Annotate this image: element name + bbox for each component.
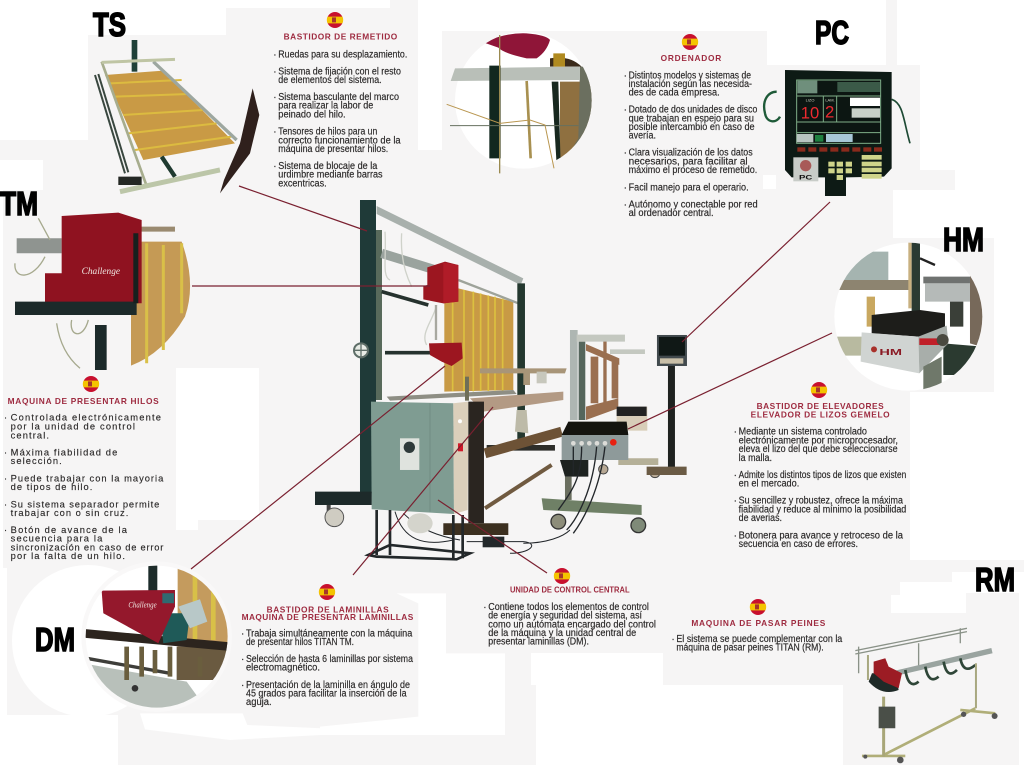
panel: maquina de presentar hilos: sincronización en caso de error (11, 542, 163, 552)
panel: bastidor de remetido: · (273, 66, 277, 77)
label PC: PC (815, 14, 849, 51)
panel: ordenador: · (624, 199, 627, 210)
panel: maquina de presentar hilos: · (4, 525, 7, 535)
icon: handwheel (354, 343, 368, 357)
icon: flag remetido (327, 12, 343, 28)
panel: maquina de presentar hilos: selección. (11, 456, 62, 466)
panel: bastidor de elevadores: fiabilidad y reduce al mínimo la posibilidad (739, 504, 906, 515)
panel: bastidor de remetido: excentricas. (278, 178, 327, 189)
photo: DM head (86, 566, 228, 708)
photo: HM lifter (830, 242, 987, 391)
panel: bastidor de elevadores: Su sencillez y robustez, ofrece la máxima (739, 496, 903, 507)
panel: ordenador: Clara visualización de los datos (629, 148, 753, 159)
panel: maquina de presentar hilos: secuencia para la (11, 534, 103, 544)
electrical cabinet (371, 402, 468, 514)
screen readout: 10 (801, 103, 819, 122)
panel: ordenador: instalación según las necesida- (629, 79, 752, 90)
panel: ordenador: des de cada empresa. (629, 88, 720, 99)
icon: flag laminillas (319, 584, 335, 600)
panel: unidad de control central: de la máquina y la unidad central de (488, 628, 637, 639)
panel: bastidor de elevadores: eleva el lizo del que debe seleccionarse (739, 444, 898, 455)
panel: unidad de control central: UNIDAD DE CONTROL CENTRAL (510, 585, 630, 595)
head DM (429, 343, 463, 366)
label DM: DM (35, 621, 75, 658)
yarn sheet (444, 285, 513, 392)
panel: bastidor de elevadores: BASTIDOR DE ELEVADORES (757, 401, 884, 411)
panel: maquina de presentar hilos: Su sistema separador permite (11, 499, 159, 509)
panel: bastidor de laminillas: aguja. (246, 697, 272, 708)
panel: maquina de presentar hilos: Botón de avance de la (11, 525, 128, 535)
panel: bastidor de laminillas (241, 604, 414, 708)
photo: PC control panel (764, 70, 910, 196)
panel: ordenador: que trabajan en espejo para su (629, 113, 754, 124)
panel: maquina de presentar hilos: por la unidad de control (11, 421, 135, 431)
panel: bastidor de laminillas: 45 grados para facilitar la inserción de la (246, 689, 407, 700)
photo: TS frame (95, 40, 259, 193)
panel: maquina de presentar hilos: de tipos de hilo. (11, 482, 92, 492)
icon: flag unidad (554, 568, 570, 584)
icon: flag elevadores (811, 382, 827, 398)
panel: bastidor de remetido: urdimbre mediante barras (278, 170, 383, 181)
brand: Challenge (128, 599, 157, 609)
function keys (797, 147, 882, 152)
badge PC (793, 157, 818, 181)
panel: maquina de presentar hilos: Máxima fiabilidad de (11, 447, 117, 457)
caster left (325, 505, 344, 527)
panel: bastidor de remetido: · (273, 161, 277, 172)
panel: maquina de pasar peines: MAQUINA DE PASAR PEINES (691, 618, 826, 628)
panel: bastidor de laminillas: Selección de hasta 6 laminillas por sistema (246, 654, 413, 665)
panel: ordenador: Facil manejo para el operario. (629, 182, 749, 193)
photo: TM head (15, 213, 190, 370)
connector lines (191, 186, 832, 575)
panel: bastidor de laminillas: Presentación de la laminilla en ángulo de (246, 680, 410, 691)
panel: unidad de control central: Contiene todos los elementos de control (488, 602, 649, 613)
icon: flag hilos (83, 376, 99, 392)
panel: bastidor de elevadores: Botonera para avance y retroceso de la (739, 530, 903, 541)
black pillar and base (315, 402, 570, 559)
panel: bastidor de elevadores (734, 401, 906, 550)
panel: bastidor de laminillas: · (241, 628, 244, 639)
panel: maquina de pasar peines: · (671, 634, 675, 645)
panel: bastidor de elevadores: · (734, 470, 737, 481)
panel: bastidor de elevadores: ELEVADOR DE LIZOS GEMELO (751, 410, 890, 420)
panel: bastidor de remetido: Sistema de fijación con el resto (278, 66, 401, 77)
panel: maquina de presentar hilos: · (4, 473, 7, 483)
panel: bastidor de remetido: máquina de presentar hilos. (278, 144, 388, 155)
panel: maquina de presentar hilos: por la falta de un hilo. (11, 551, 125, 561)
panel: bastidor de laminillas: Trabaja simultáneamente con la máquina (246, 628, 413, 639)
table and lower beams (387, 368, 567, 508)
panel: unidad de control central: · (483, 602, 487, 613)
drawing-in side frame (515, 330, 645, 433)
panel: ordenador: máximo el proceso de remetido. (629, 165, 757, 176)
panel: bastidor de remetido: correcto funcionamiento de la (278, 135, 401, 146)
panel: maquina de presentar hilos: central. (11, 430, 49, 440)
screen readout: 2 (825, 102, 834, 121)
brand: Challenge (82, 267, 120, 277)
badge PC: PC (799, 174, 813, 181)
panel: ordenador: posible intercambio en caso de (629, 122, 755, 133)
panel: ordenador: Distintos modelos y sistemas de (629, 70, 751, 81)
panel: bastidor de elevadores: · (734, 427, 737, 438)
panel: unidad de control central: de energía y seguridad del sistema, así (488, 611, 642, 622)
panel: bastidor de laminillas: BASTIDOR DE LAMINILLAS (267, 604, 389, 614)
main machine: warp drawing-in frame (315, 200, 687, 559)
brand HM: HM (879, 348, 903, 357)
panel: bastidor de laminillas: de presentar hilos TITAN TM. (246, 637, 354, 648)
panel: maquina de presentar hilos: trabajar con o sin cruz. (11, 508, 128, 518)
panel: maquina de presentar hilos (4, 396, 164, 561)
panel: ordenador: ORDENADOR (661, 53, 721, 63)
panel: ordenador (624, 53, 758, 219)
label TM: TM (0, 185, 38, 222)
panel: maquina de pasar peines: máquina de pasar peines TITAN (RM). (676, 643, 824, 654)
panel: unidad de control central: como un autómata encargado del control (488, 619, 656, 630)
panel: maquina de presentar hilos: · (4, 413, 7, 423)
panel: bastidor de elevadores: Mediante un sistema controlado (739, 427, 867, 438)
icon: flag ordenador (682, 34, 698, 50)
panel: ordenador: · (624, 70, 627, 81)
panel: bastidor de remetido (273, 32, 407, 189)
panel: bastidor de remetido: Sistema basculante del marco (278, 92, 399, 103)
photo: ordenador rails (447, 32, 593, 173)
panel: bastidor de elevadores: la malla. (739, 453, 772, 464)
keypad (828, 155, 882, 180)
panel: ordenador: · (624, 148, 627, 159)
panel: maquina de pasar peines (671, 618, 843, 654)
photo: PC control panel: LAM. (825, 98, 835, 103)
panel: ordenador: · (624, 105, 627, 116)
panel: bastidor de remetido: · (273, 92, 277, 103)
panel: bastidor de remetido: Ruedas para su desplazamiento. (278, 49, 407, 60)
panel: bastidor de elevadores: Admite los distintos tipos de lizos que existen (739, 470, 906, 481)
panel: bastidor de elevadores: en el mercado. (739, 479, 799, 490)
panel: unidad de control central: presentar laminillas (DM). (488, 637, 589, 648)
panel: bastidor de laminillas: · (241, 680, 244, 691)
control box trolley (542, 407, 660, 533)
panel: bastidor de laminillas: MAQUINA DE PRESENTAR LAMINILLAS (242, 612, 414, 622)
panel: maquina de presentar hilos: Controlada electrónicamente (11, 413, 161, 423)
panel: maquina de presentar hilos: · (4, 499, 7, 509)
label HM: HM (943, 221, 984, 258)
panel: bastidor de elevadores: secuencia en caso de errores. (739, 539, 858, 550)
label TS: TS (93, 6, 126, 43)
photo: RM comb machine (855, 628, 998, 763)
panel: maquina de pasar peines: El sistema se puede complementar con la (676, 634, 843, 645)
panel: bastidor de remetido: de elementos del sistema. (278, 75, 382, 86)
panel: bastidor de remetido: BASTIDOR DE REMETIDO (284, 32, 398, 42)
panel: bastidor de remetido: peinado del hilo. (278, 109, 346, 120)
head TM (423, 262, 458, 303)
panel: ordenador: Autónomo y conectable por red (629, 199, 758, 210)
panel: bastidor de elevadores: electrónicamente por microprocesador, (739, 435, 898, 446)
panel: maquina de presentar hilos: · (4, 447, 7, 457)
icon: flag peines (750, 599, 766, 615)
frame rail and posts (360, 200, 525, 493)
panel: bastidor de laminillas: electromagnético. (246, 663, 320, 674)
panel: ordenador: necesarios, para facilitar al (629, 156, 748, 167)
panel: ordenador: · (624, 182, 627, 193)
panel: bastidor de laminillas: · (241, 654, 244, 665)
panel: maquina de presentar hilos: Puede trabajar con la mayoria (11, 473, 164, 483)
panel: ordenador: avería. (629, 131, 656, 142)
panel: ordenador: Dotado de dos unidades de disco (629, 105, 758, 116)
panel: bastidor de elevadores: · (734, 530, 737, 541)
panel: maquina de presentar hilos: MAQUINA DE PRESENTAR HILOS (8, 396, 159, 406)
panel: bastidor de remetido: Sistema de blocaje de la (278, 161, 378, 172)
panel: ordenador: al ordenador central. (629, 208, 714, 219)
panel: bastidor de elevadores: · (734, 496, 737, 507)
panel: bastidor de remetido: · (273, 49, 277, 60)
screen readout (801, 102, 834, 122)
panel: bastidor de remetido: · (273, 127, 277, 138)
panel: bastidor de remetido: para realizar la labor de (278, 101, 374, 112)
PC stand (647, 335, 687, 475)
panel: bastidor de elevadores: de averias. (739, 513, 782, 524)
panel: unidad de control central (483, 585, 656, 648)
photo: PC control panel: LIZO (806, 98, 814, 103)
panel: bastidor de remetido: Tensores de hilos para un (278, 127, 377, 138)
